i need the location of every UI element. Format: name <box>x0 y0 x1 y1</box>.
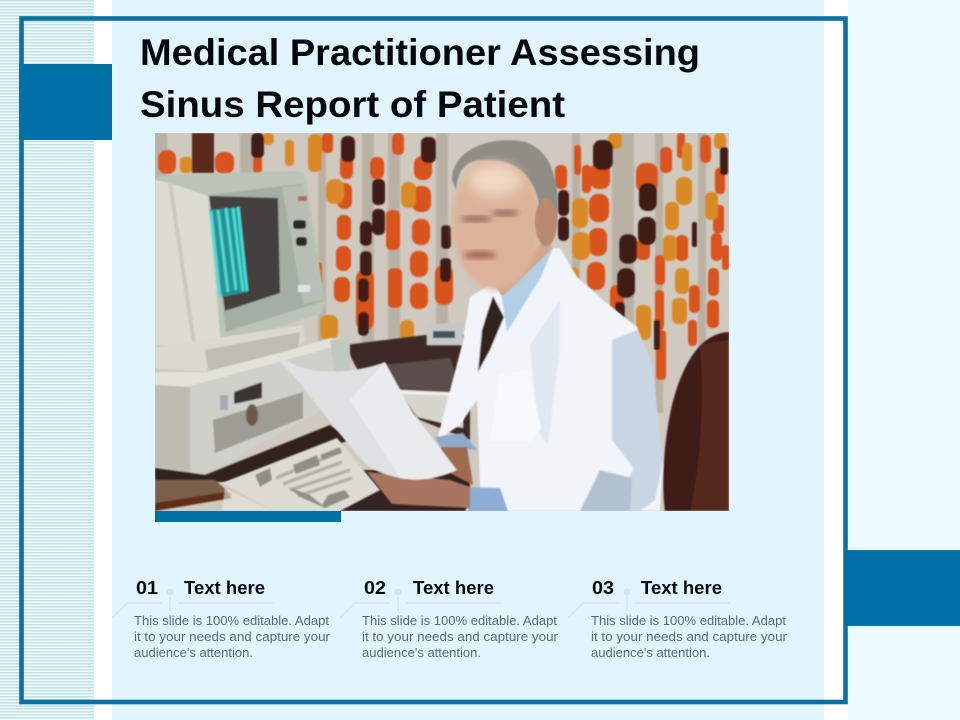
accent block: bottom right <box>845 550 960 626</box>
title: Medical Practitioner Assessing <box>140 32 700 73</box>
body 02 <box>362 613 559 660</box>
title: Sinus Report of Patient <box>140 84 565 125</box>
heading 01: Text here <box>184 578 265 598</box>
step 01 <box>112 578 331 660</box>
body 02: audience's attention. <box>362 645 481 660</box>
keyboard <box>222 438 380 511</box>
desk, wood tray <box>155 425 470 511</box>
background: central light blue panel <box>112 0 824 720</box>
paper report and hand <box>275 355 470 508</box>
doctor: chair, coat, tie and cuffs <box>435 240 729 511</box>
body 01: audience's attention. <box>134 645 253 660</box>
body 03 <box>591 613 788 660</box>
desk background and small device <box>345 322 470 440</box>
title <box>140 32 700 125</box>
body 01 <box>134 613 331 660</box>
number 03: 03 <box>592 578 614 598</box>
curtain folds and dots <box>155 133 729 413</box>
doctor head (blurred face) <box>452 140 558 290</box>
background: striped left band <box>0 0 94 720</box>
body 02: This slide is 100% editable. Adapt <box>362 613 557 628</box>
photo: doctor reading report beside a computer <box>155 133 729 511</box>
body 01: This slide is 100% editable. Adapt <box>134 613 329 628</box>
heading 02: Text here <box>413 578 494 598</box>
heading 03: Text here <box>641 578 722 598</box>
connector 03 <box>568 588 730 618</box>
step 03 <box>568 578 788 660</box>
body 02: it to your needs and capture your <box>362 629 559 644</box>
body 01: it to your needs and capture your <box>134 629 331 644</box>
body 03: it to your needs and capture your <box>591 629 788 644</box>
connector 02 <box>340 588 501 618</box>
computer base unit <box>155 338 350 474</box>
body 03: This slide is 100% editable. Adapt <box>591 613 786 628</box>
number 01: 01 <box>136 578 158 598</box>
connector 01 <box>112 588 273 618</box>
accent block: top left <box>19 64 112 140</box>
body 03: audience's attention. <box>591 645 710 660</box>
step 02 <box>340 578 559 660</box>
number 02: 02 <box>364 578 386 598</box>
photo accent bar <box>155 511 341 522</box>
computer monitor <box>155 171 325 372</box>
background: right pale band <box>848 0 960 720</box>
